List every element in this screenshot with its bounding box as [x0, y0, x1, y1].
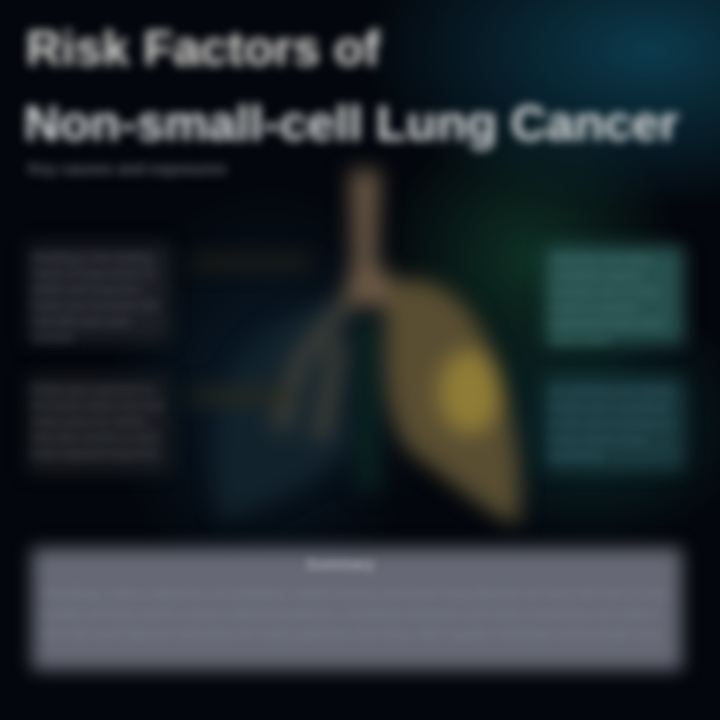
summary text: Smoking, radon, asbestos, air pollution, family history and prior lung disease all raise the risk of non-small-cell lung cancer across adult populations. Avoiding exposure and early screening can reduce the risk and improve outcomes for many patients over time, with regular checkups and prompt care.	[44, 586, 671, 641]
panel text: upper left: Smoking is the leading cause of lung cancer in adults and long-term heavy use increases the risk with each year smoked	[32, 252, 159, 344]
panel text: upper right: Asbestos and other workplace agents increase risk of lung cancer in people exposed at work over many years	[550, 254, 662, 346]
subtitle: Key causes and exposures	[28, 161, 227, 178]
bronchus junction	[348, 270, 390, 306]
panel: lower right	[546, 378, 684, 470]
left lung	[214, 300, 350, 520]
panel: upper left	[28, 244, 170, 342]
panel text: lower left: Radon gas exposure in the home raises risk over many years for adults who also smoke or have been exposed long term	[32, 384, 165, 460]
panel: bottom summary	[32, 548, 682, 670]
connector	[190, 390, 290, 402]
panel: lower left	[28, 376, 170, 472]
summary heading: Summary	[306, 556, 374, 573]
right lung	[385, 279, 520, 525]
panel: upper right	[546, 246, 684, 344]
panel text: lower right: Air pollution and family history also contribute to the risk of disease in many adults today worldwide	[550, 386, 672, 462]
mediastinum	[358, 320, 378, 490]
trachea	[350, 170, 380, 290]
title: Risk Factors of	[26, 22, 380, 76]
left bronchi	[280, 295, 352, 440]
connector	[190, 257, 310, 267]
tumour glow	[438, 350, 502, 434]
title line two: Non-small-cell Lung Cancer	[24, 96, 679, 151]
